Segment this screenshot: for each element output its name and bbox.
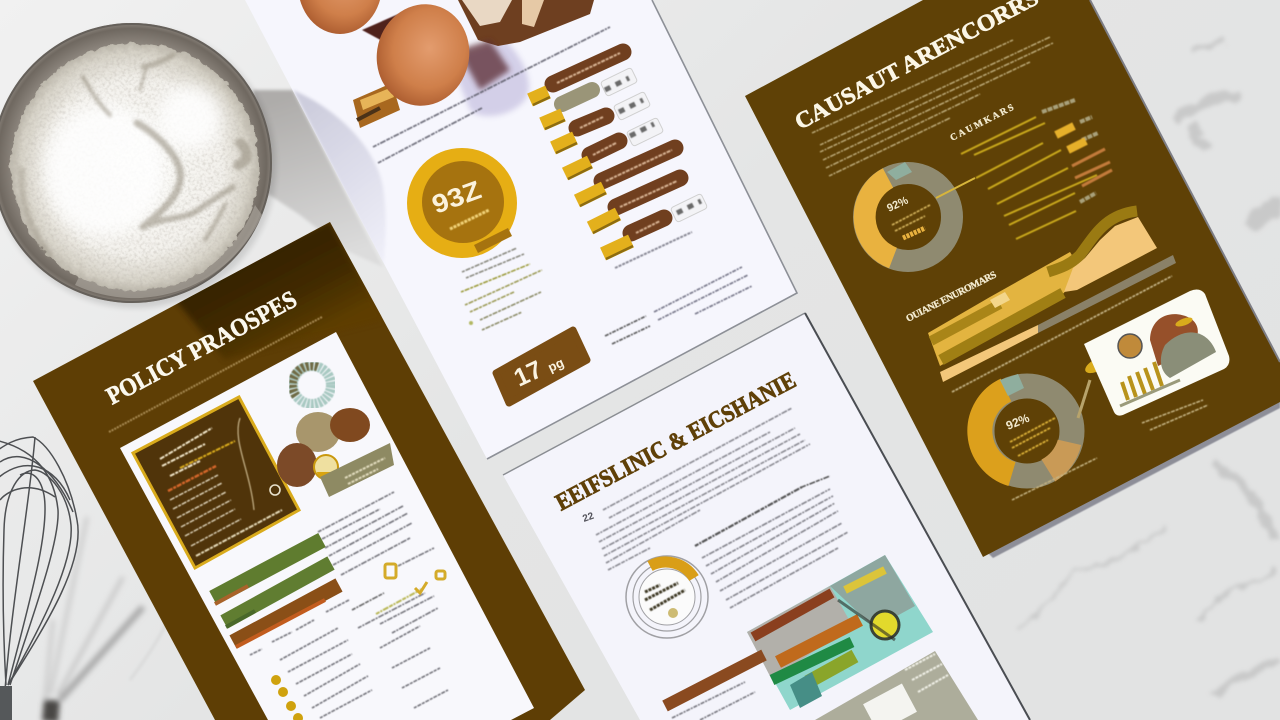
donut chart 93 percent bbox=[407, 148, 517, 258]
heading: EEIFSLINIC & EICSHANIE bbox=[552, 368, 800, 516]
legend text under donut bbox=[461, 248, 542, 330]
image: food illustration top bbox=[353, 0, 594, 128]
ring chart teal bbox=[293, 366, 331, 404]
area chart bbox=[928, 211, 1176, 392]
icon chips bbox=[600, 67, 708, 223]
green bars bbox=[213, 540, 339, 647]
white image card bbox=[1084, 290, 1229, 416]
stat box 17 pg bbox=[496, 330, 587, 403]
panel: white report with donut and bars bbox=[245, 0, 797, 459]
illustration: nut blobs bbox=[277, 408, 394, 497]
body text beside box bbox=[318, 492, 438, 633]
flour furrows bbox=[22, 55, 247, 255]
donut chart 93 percent: 93Z bbox=[428, 174, 485, 220]
ring chart bbox=[626, 556, 708, 638]
intro text bbox=[373, 27, 610, 163]
brown strip and caption bbox=[665, 655, 764, 706]
subheading: CAUMKARS bbox=[949, 103, 1016, 144]
heading: POLICY PRAOSPES bbox=[102, 286, 302, 410]
intro text bbox=[812, 37, 1053, 176]
stat box 17 pg: 17 pg bbox=[510, 346, 567, 392]
panel: lower white report bbox=[503, 313, 1030, 720]
whisk shadow bbox=[45, 517, 143, 720]
intro text bbox=[596, 408, 810, 570]
footnote text bbox=[605, 267, 752, 344]
panel: left brown poster bbox=[33, 222, 585, 720]
donut chart one: 92% bbox=[885, 194, 910, 215]
panel: lower white report: 22 bbox=[581, 511, 596, 525]
subheading and column bbox=[695, 476, 848, 608]
white inset bbox=[120, 332, 534, 720]
donut chart two bbox=[980, 374, 1072, 476]
pill list bbox=[530, 52, 708, 268]
bowl shadow on page bbox=[293, 90, 386, 267]
donut chart one bbox=[864, 162, 975, 261]
icon: egg front bbox=[366, 0, 480, 116]
panel: right brown poster bbox=[745, 0, 1280, 557]
list with yellow dots bbox=[250, 600, 448, 720]
icon: whisk bbox=[0, 437, 78, 720]
chart subheading: OUIANE ENUROMARS bbox=[904, 269, 999, 325]
leader with gold blob bbox=[1078, 354, 1111, 418]
small icons bbox=[385, 564, 445, 593]
icon: egg rear bbox=[298, 0, 382, 34]
paper: right brown poster shadow bbox=[985, 398, 1280, 558]
donut captions bbox=[1012, 400, 1208, 500]
leader lines list bbox=[961, 100, 1112, 239]
egg shadow bbox=[450, 40, 529, 116]
bowl shadow on marble bbox=[253, 90, 383, 267]
icon: flour bowl bbox=[0, 23, 276, 308]
image card teal with bars bbox=[747, 555, 933, 710]
grey panel bbox=[815, 651, 978, 720]
donut chart two: 92% bbox=[1004, 411, 1032, 433]
callout box gold border bbox=[133, 397, 299, 568]
